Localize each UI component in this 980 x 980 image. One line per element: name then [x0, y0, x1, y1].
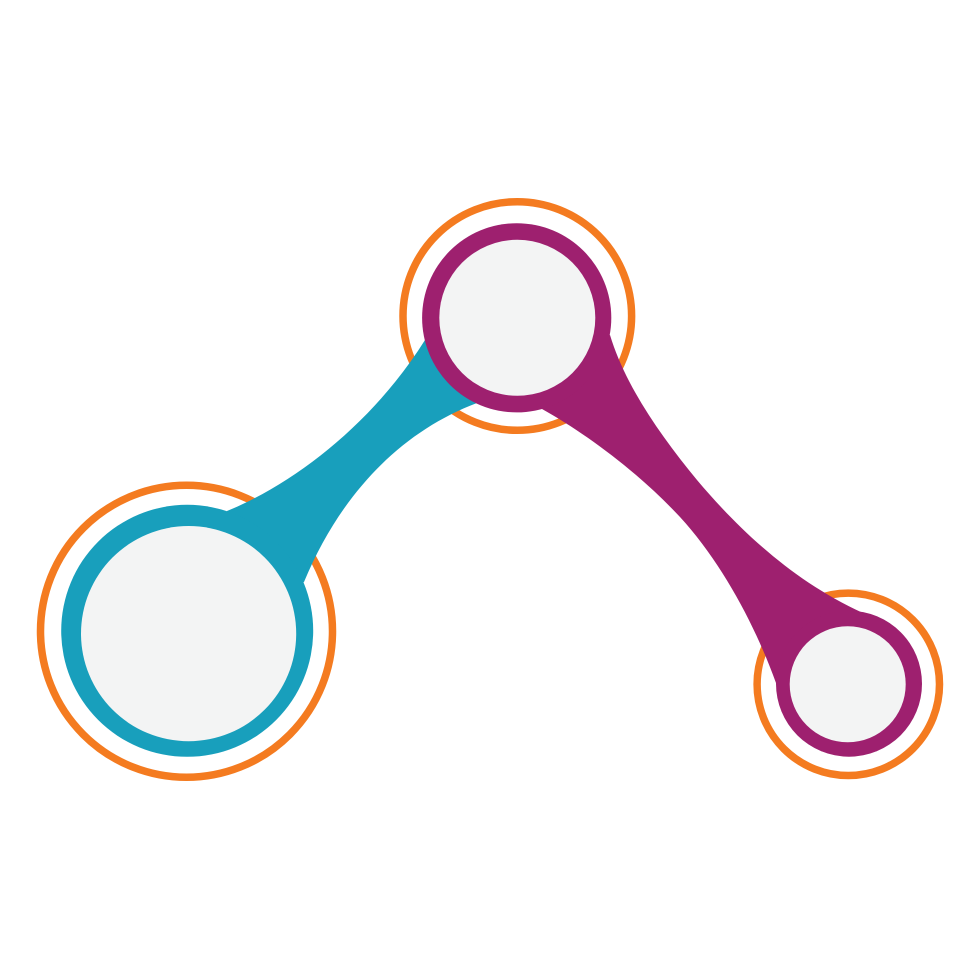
outer orange ring: right node	[757, 593, 940, 776]
center disc: left node	[81, 526, 296, 741]
teal connector	[190, 330, 500, 630]
purple ring: top node	[422, 223, 611, 412]
teal ring: left node	[61, 505, 313, 757]
purple ring: right node	[776, 611, 922, 757]
center disc: right node	[790, 626, 906, 742]
outer orange ring: left node	[40, 485, 332, 777]
purple connector	[540, 335, 863, 684]
outer orange ring: top node	[403, 202, 632, 430]
center disc: top node	[439, 240, 595, 396]
